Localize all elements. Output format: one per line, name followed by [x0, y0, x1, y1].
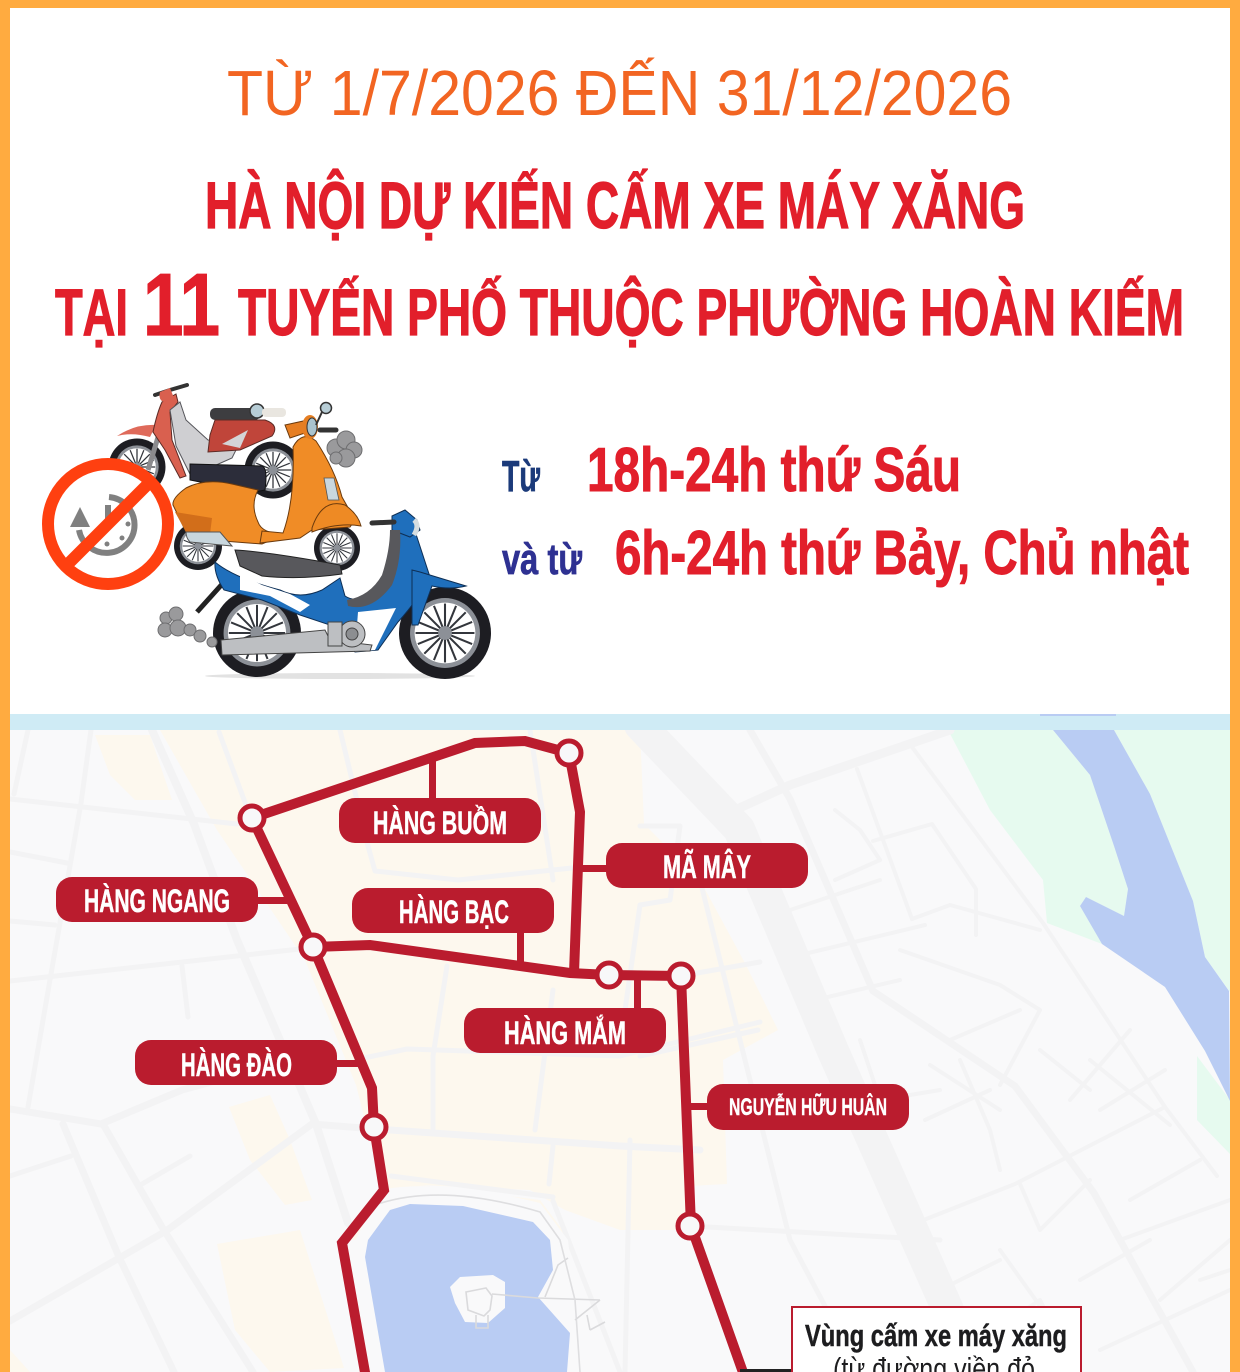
label: Nguyễn Hữu Huân: NGUYỄN HỮU HUÂN [729, 1092, 887, 1121]
label: Hàng Mắm [464, 976, 666, 1053]
map: streets [211, 730, 954, 1240]
label: Hàng Mắm: HÀNG MẮM [504, 1015, 626, 1051]
icon: clock [70, 497, 135, 553]
label: Hàng Bạc: HÀNG BẠC [399, 894, 509, 930]
smoke: blue motorbike [158, 607, 217, 647]
route: Mã Mây [569, 753, 580, 973]
route: Hàng Ngang, Hàng Đào [252, 818, 384, 1372]
label: Nguyễn Hữu Huân [687, 1084, 909, 1130]
main title [55, 168, 1184, 354]
route: Hàng Bạc, Hàng Mắm [313, 945, 681, 976]
label: Hàng Đào: HÀNG ĐÀO [181, 1047, 292, 1083]
map: river top band overlay [1040, 714, 1116, 716]
map: old quarter zones [10, 730, 778, 1372]
route lines [252, 741, 745, 1372]
map: top band [10, 714, 1230, 730]
route: Nguyễn Hữu Huân [681, 976, 745, 1372]
schedule line 1: Từ [502, 452, 540, 501]
schedule line 1: 18h-24h thứ Sáu [587, 436, 961, 505]
motorbike: blue [197, 510, 491, 679]
label: Hàng Bạc [352, 888, 554, 966]
route: Hàng Buồm [252, 741, 569, 818]
label: Hàng Đào [135, 1040, 361, 1085]
title line 2: 11 [143, 255, 220, 354]
label: Hàng Buồm: HÀNG BUỒM [373, 805, 507, 841]
label: Hàng Ngang: HÀNG NGANG [84, 883, 230, 919]
callout: ban zone: Vùng cấm xe máy xăng [805, 1318, 1067, 1353]
map background [10, 714, 1230, 1372]
callout: ban zone [792, 1307, 1081, 1372]
title line 2 [55, 255, 1184, 354]
icon: no time restriction sign [48, 464, 168, 584]
map [10, 714, 1230, 1372]
map: Hoan Kiem lake [345, 1186, 605, 1372]
motorbike: orange scooter [173, 402, 361, 571]
label: Hàng Ngang [56, 877, 288, 922]
title line 2: TẠI [55, 275, 128, 349]
map: Red River [1053, 730, 1230, 1101]
right frame edge [1230, 0, 1240, 1372]
label: Mã Mây [578, 843, 808, 888]
callout connector [740, 1369, 792, 1372]
schedule text [502, 436, 1189, 588]
map: green park [948, 730, 1230, 1154]
schedule line 2: và từ [502, 535, 582, 584]
date heading: TỪ 1/7/2026 ĐẾN 31/12/2026 [227, 57, 1012, 129]
label: Mã Mây: MÃ MÂY [663, 849, 751, 885]
label: Hàng Buồm [339, 760, 541, 843]
schedule line 1 [502, 436, 961, 505]
route nodes [240, 741, 702, 1238]
motorbike: red [108, 385, 302, 498]
illustration: three motorbikes and no-entry sign [48, 385, 491, 679]
smoke: orange scooter [327, 431, 362, 467]
